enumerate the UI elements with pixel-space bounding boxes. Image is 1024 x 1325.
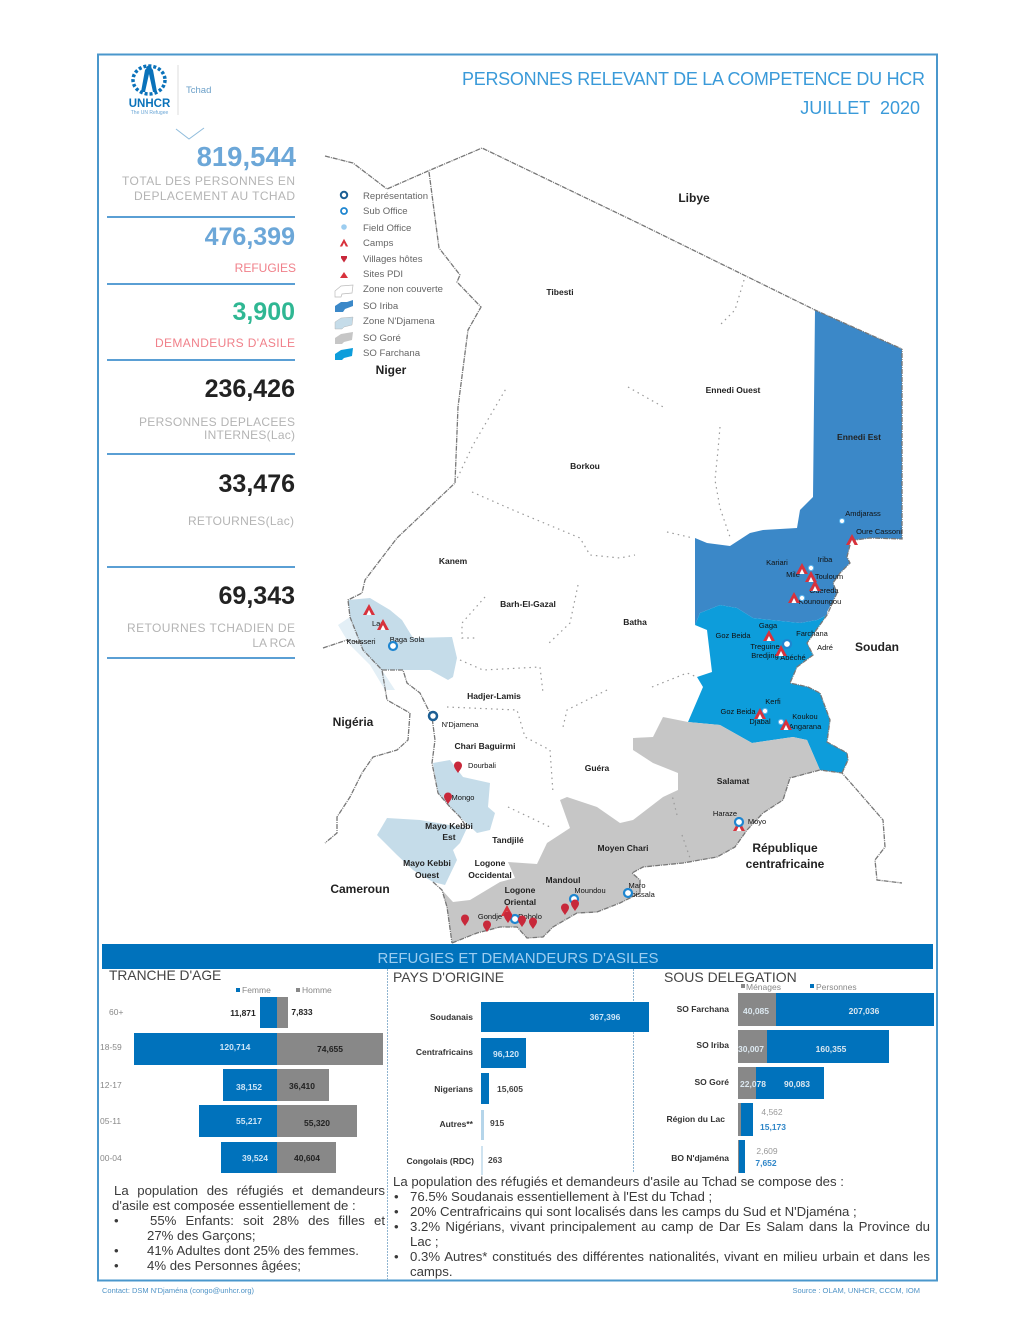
map labels: provinces: Occidental: [468, 870, 512, 880]
chart: sous delegation: SO Farchana: [677, 1004, 729, 1014]
map labels: localities: Maro: [628, 881, 646, 890]
chart: tranche d'age: 120,714: [220, 1042, 251, 1052]
chart: sous delegation: 30,007: [738, 1044, 764, 1054]
chart: tranche d'age: TRANCHE D'AGE: [109, 968, 221, 983]
UNHCR logo: The UN Refugee: [131, 110, 168, 116]
chart: pays d'origine: Congolais (RDC): [406, 1156, 474, 1166]
chart: pays d'origine: 367,396: [590, 1012, 621, 1022]
zone: SO Gore: [442, 717, 820, 943]
map labels: countries: Cameroun: [330, 882, 390, 896]
map labels: provinces: Chari Baguirmi: [455, 741, 515, 751]
map labels: localities: Angarana: [789, 722, 822, 731]
chart: pays d'origine: 15,605: [497, 1084, 523, 1094]
map legend: Villages hôtes: [363, 254, 423, 265]
map labels: provinces: Hadjer-Lamis: [467, 691, 521, 701]
map labels: localities: Dourbali: [468, 761, 496, 770]
map labels: localities: Abéché: [780, 653, 806, 662]
page frame: [98, 54, 937, 1280]
map labels: localities: N'Djamena: [442, 720, 479, 729]
zone: Chari: [433, 760, 495, 833]
zone: Lac: [348, 598, 457, 680]
stat: personnes deplacees internes: PERSONNES DEPLACEES: [139, 415, 295, 429]
stat: retournes lac: 33,476: [219, 470, 295, 498]
map labels: provinces: Tandjilé: [492, 835, 524, 845]
map labels: localities: Gaga: [759, 621, 778, 630]
chart: sous delegation: 40,085: [743, 1006, 769, 1016]
stat: total: 819,544: [197, 141, 297, 172]
chart: sous delegation: SOUS DELEGATION: [664, 969, 797, 985]
map legend: [335, 191, 443, 360]
text block: origin composition: 76.5% Soudanais essentiellement à l'Est du Tchad ;: [410, 1189, 712, 1204]
stat: retournes lac: RETOURNES(Lac): [188, 514, 294, 528]
chart: tranche d'age: 18-59: [100, 1042, 122, 1052]
map legend: Field Office: [363, 223, 411, 234]
footer: contact: Contact: DSM N'Djaména (congo@unhcr.org): [102, 1286, 255, 1295]
map labels: provinces: Kanem: [439, 556, 468, 566]
chart: sous delegation: 4,562: [761, 1107, 783, 1117]
map legend: SO Farchana: [363, 348, 421, 359]
title: JUILLET 2020: [800, 98, 920, 118]
chart: pays d'origine: Nigerians: [434, 1084, 473, 1094]
chart: sous delegation: 7,652: [755, 1158, 777, 1168]
section header bar: [102, 944, 933, 969]
stat: personnes deplacees internes: INTERNES(Lac): [204, 428, 295, 442]
chart: tranche d'age: 12-17: [100, 1080, 122, 1090]
map labels: localities: Haraze: [713, 809, 737, 818]
stat: demandeurs d'asile: DEMANDEURS D'ASILE: [155, 336, 295, 350]
stat: retournes RCA: 69,343: [219, 582, 295, 610]
map labels: localities: Iriba: [818, 555, 833, 564]
chart: tranche d'age: 60+: [109, 1007, 123, 1017]
map labels: provinces: Logone: [505, 885, 536, 895]
chevron: [176, 128, 204, 139]
text block: origin composition: •: [394, 1189, 399, 1204]
map labels: localities: Kariari: [766, 558, 788, 567]
map labels: localities: Koukou: [792, 712, 818, 721]
map labels: provinces: Logone: [475, 858, 506, 868]
map legend: Zone non couverte: [363, 284, 443, 295]
map legend: Zone N'Djamena: [363, 316, 435, 327]
map labels: localities: Adré: [817, 643, 833, 652]
map labels: localities: Farchana: [796, 629, 829, 638]
chart: tranche d'age: [100, 968, 383, 1173]
map labels: localities: Kousseri: [346, 637, 376, 646]
text block: origin composition: La population des réfugiés et demandeurs d'asile au Tchad se compose des :: [393, 1174, 844, 1189]
chart: pays d'origine: [393, 969, 649, 1175]
map labels: localities: Lac: [372, 619, 384, 628]
stat: retournes RCA: LA RCA: [252, 636, 295, 650]
map labels: localities: Amdjarass: [845, 509, 881, 518]
stat: demandeurs d'asile: [155, 298, 295, 350]
chart: tranche d'age: 38,152: [236, 1082, 262, 1092]
zone: Lac shoreline water: [338, 617, 395, 690]
chart: sous delegation: 207,036: [849, 1006, 880, 1016]
map labels: localities: Moissala: [625, 890, 656, 899]
zone: Mayo Kebbi: [377, 818, 467, 885]
map of Chad: [323, 148, 902, 943]
text block: origin composition: camps.: [410, 1264, 453, 1279]
map labels: localities: Mile: [786, 570, 800, 579]
stat: demandeurs d'asile: 3,900: [232, 298, 295, 326]
map labels: provinces: [403, 287, 881, 907]
map legend: Représentation: [363, 191, 428, 202]
text block: origin composition: 0.3% Autres* constitués des différentes nationalités, vivant en milieu urbain et dans les: [410, 1249, 930, 1264]
map labels: provinces: Est: [442, 832, 456, 842]
chart: tranche d'age: 11,871: [230, 1008, 256, 1018]
stat: total: [122, 141, 297, 203]
UNHCR logo: UNHCR: [129, 98, 171, 110]
map labels: localities: Kerfi: [765, 697, 781, 706]
text block: age composition: 55% Enfants: soit 28% des filles et: [150, 1213, 385, 1228]
stat: retournes RCA: RETOURNES TCHADIEN DE: [127, 621, 295, 635]
stat: personnes deplacees internes: 236,426: [205, 375, 295, 403]
chart: sous delegation: Région du Lac: [666, 1114, 725, 1124]
chart: pays d'origine: Autres**: [439, 1119, 474, 1129]
chart: tranche d'age: 40,604: [294, 1153, 320, 1163]
map labels: provinces: Barh-El-Gazal: [500, 599, 556, 609]
stat: retournes RCA: [127, 582, 295, 650]
text block: age composition: •: [114, 1258, 119, 1273]
text block: origin composition: •: [394, 1204, 399, 1219]
stat: personnes deplacees internes: [139, 375, 295, 442]
zone: SO Farchana: [688, 605, 848, 773]
chart: tranche d'age: 36,410: [289, 1081, 315, 1091]
chart: tranche d'age: 05-11: [100, 1116, 121, 1126]
map labels: provinces: Ouest: [415, 870, 439, 880]
map labels: localities: Oure Cassoni: [856, 527, 902, 536]
map labels: countries: Libye: [678, 191, 710, 205]
chart: sous delegation: Personnes: [816, 982, 857, 992]
map labels: localities: Goz Beida: [715, 631, 751, 640]
text block: age composition: La population des réfugiés et demandeurs: [114, 1183, 385, 1198]
map labels: countries: Soudan: [855, 640, 899, 654]
text block: age composition: d'asile est composée essentiellement de :: [112, 1198, 356, 1213]
map labels: provinces: Mayo Kebbi: [425, 821, 473, 831]
footer: source: Source : OLAM, UNHCR, CCCM, IOM: [792, 1286, 920, 1295]
text block: age composition: •: [114, 1243, 119, 1258]
chart: tranche d'age: 7,833: [291, 1007, 313, 1017]
stat: refugies: REFUGIES: [235, 261, 296, 275]
map legend: Camps: [363, 238, 394, 249]
map legend: SO Goré: [363, 333, 401, 344]
international borders: [323, 148, 902, 943]
map labels: localities: Touloum: [815, 572, 843, 581]
map labels: localities: Djabal: [749, 717, 771, 726]
text block: age composition: 4% des Personnes âgées;: [147, 1258, 301, 1273]
zone: SO Iriba: [695, 310, 902, 625]
stat: retournes lac: [188, 470, 295, 528]
text block: origin composition: •: [394, 1219, 399, 1234]
chart: sous delegation: 22,078: [740, 1079, 766, 1089]
map labels: countries: Nigéria: [333, 715, 374, 729]
map labels: localities: Treguine: [750, 642, 780, 651]
chart: sous delegation: Ménages: [746, 982, 781, 992]
chart: sous delegation: 160,355: [816, 1044, 847, 1054]
map labels: provinces: Moyen Chari: [597, 843, 649, 853]
map labels: localities: Mongo: [452, 793, 474, 802]
map labels: localities: Goz Beida: [720, 707, 756, 716]
text block: age composition: 27% des Garçons;: [147, 1228, 256, 1243]
map legend: Sub Office: [363, 206, 408, 217]
map labels: provinces: Oriental: [504, 897, 536, 907]
map labels: localities: Doholo: [518, 912, 542, 921]
map labels: localities: Gondje: [478, 912, 502, 921]
stat: total: TOTAL DES PERSONNES EN: [122, 174, 295, 188]
chart: tranche d'age: 00-04: [100, 1153, 122, 1163]
map labels: countries: République: [752, 841, 818, 855]
UNHCR logo: Tchad: [186, 85, 211, 96]
map labels: localities: Moundou: [574, 886, 606, 895]
map labels: countries: centrafricaine: [746, 857, 825, 871]
map labels: localities: Baga Sola: [390, 635, 425, 644]
map labels: localities: Kounoungou: [799, 597, 841, 606]
map labels: provinces: Ennedi Ouest: [706, 385, 761, 395]
stat: refugies: [205, 223, 296, 275]
map labels: provinces: Tibesti: [546, 287, 574, 297]
map labels: provinces: Borkou: [570, 461, 600, 471]
text block: origin composition: •: [394, 1249, 399, 1264]
chart: sous delegation: SO Iriba: [696, 1040, 729, 1050]
map legend: SO Iriba: [363, 301, 399, 312]
region boundaries: [447, 280, 744, 858]
map labels: provinces: Mandoul: [546, 875, 580, 885]
map labels: localities: Bredjing: [751, 651, 779, 660]
chart: sous delegation: 90,083: [784, 1079, 810, 1089]
map labels: countries: Niger: [376, 363, 407, 377]
chart: tranche d'age: 74,655: [317, 1044, 343, 1054]
chart: tranche d'age: Femme: [242, 985, 271, 995]
map labels: provinces: Mayo Kebbi: [403, 858, 451, 868]
stat: total: DEPLACEMENT AU TCHAD: [134, 189, 295, 203]
text block: origin composition: 20% Centrafricains qui sont localisés dans les camps du Sud et N'Djaména ;: [410, 1204, 857, 1219]
chart: sous delegation: [664, 969, 934, 1173]
map legend: Sites PDI: [363, 269, 403, 280]
text block: age composition: •: [114, 1213, 119, 1228]
map labels: localities: Guereda: [809, 586, 839, 595]
map labels: localities: [346, 509, 902, 921]
chart: pays d'origine: Centrafricains: [416, 1047, 473, 1057]
chart: tranche d'age: 39,524: [242, 1153, 268, 1163]
map labels: provinces: Ennedi Est: [837, 432, 881, 442]
chart: pays d'origine: PAYS D'ORIGINE: [393, 969, 504, 985]
map labels: localities: Moyo: [748, 817, 766, 826]
map labels: countries: [330, 191, 899, 896]
text block: origin composition: Lac ;: [410, 1234, 439, 1249]
map labels: provinces: Batha: [623, 617, 647, 627]
section header bar: REFUGIES ET DEMANDEURS D'ASILES: [378, 950, 658, 967]
chart: pays d'origine: 96,120: [493, 1049, 519, 1059]
chart: tranche d'age: Homme: [302, 985, 332, 995]
chart: pays d'origine: Soudanais: [430, 1012, 473, 1022]
title: PERSONNES RELEVANT DE LA COMPETENCE DU HCR: [462, 69, 925, 89]
chart: sous delegation: 15,173: [760, 1122, 786, 1132]
chart: sous delegation: BO N'djaména: [671, 1153, 729, 1163]
chart: tranche d'age: 55,217: [236, 1116, 262, 1126]
UNHCR logo: [129, 65, 211, 116]
chart: sous delegation: SO Goré: [695, 1077, 729, 1087]
stat: refugies: 476,399: [205, 223, 295, 251]
chart: sous delegation: 2,609: [756, 1146, 778, 1156]
text block: age composition: 41% Adultes dont 25% des femmes.: [147, 1243, 359, 1258]
title: [462, 69, 925, 118]
chart: pays d'origine: 263: [488, 1155, 502, 1165]
map labels: provinces: Salamat: [717, 776, 749, 786]
map icons: [363, 518, 858, 932]
chart: tranche d'age: 55,320: [304, 1118, 330, 1128]
chart: pays d'origine: 915: [490, 1118, 504, 1128]
map labels: provinces: Guéra: [585, 763, 610, 773]
text block: origin composition: 3.2% Nigérians, vivant principalement au camp de Dar Es Salam dans la Province du: [410, 1219, 930, 1234]
